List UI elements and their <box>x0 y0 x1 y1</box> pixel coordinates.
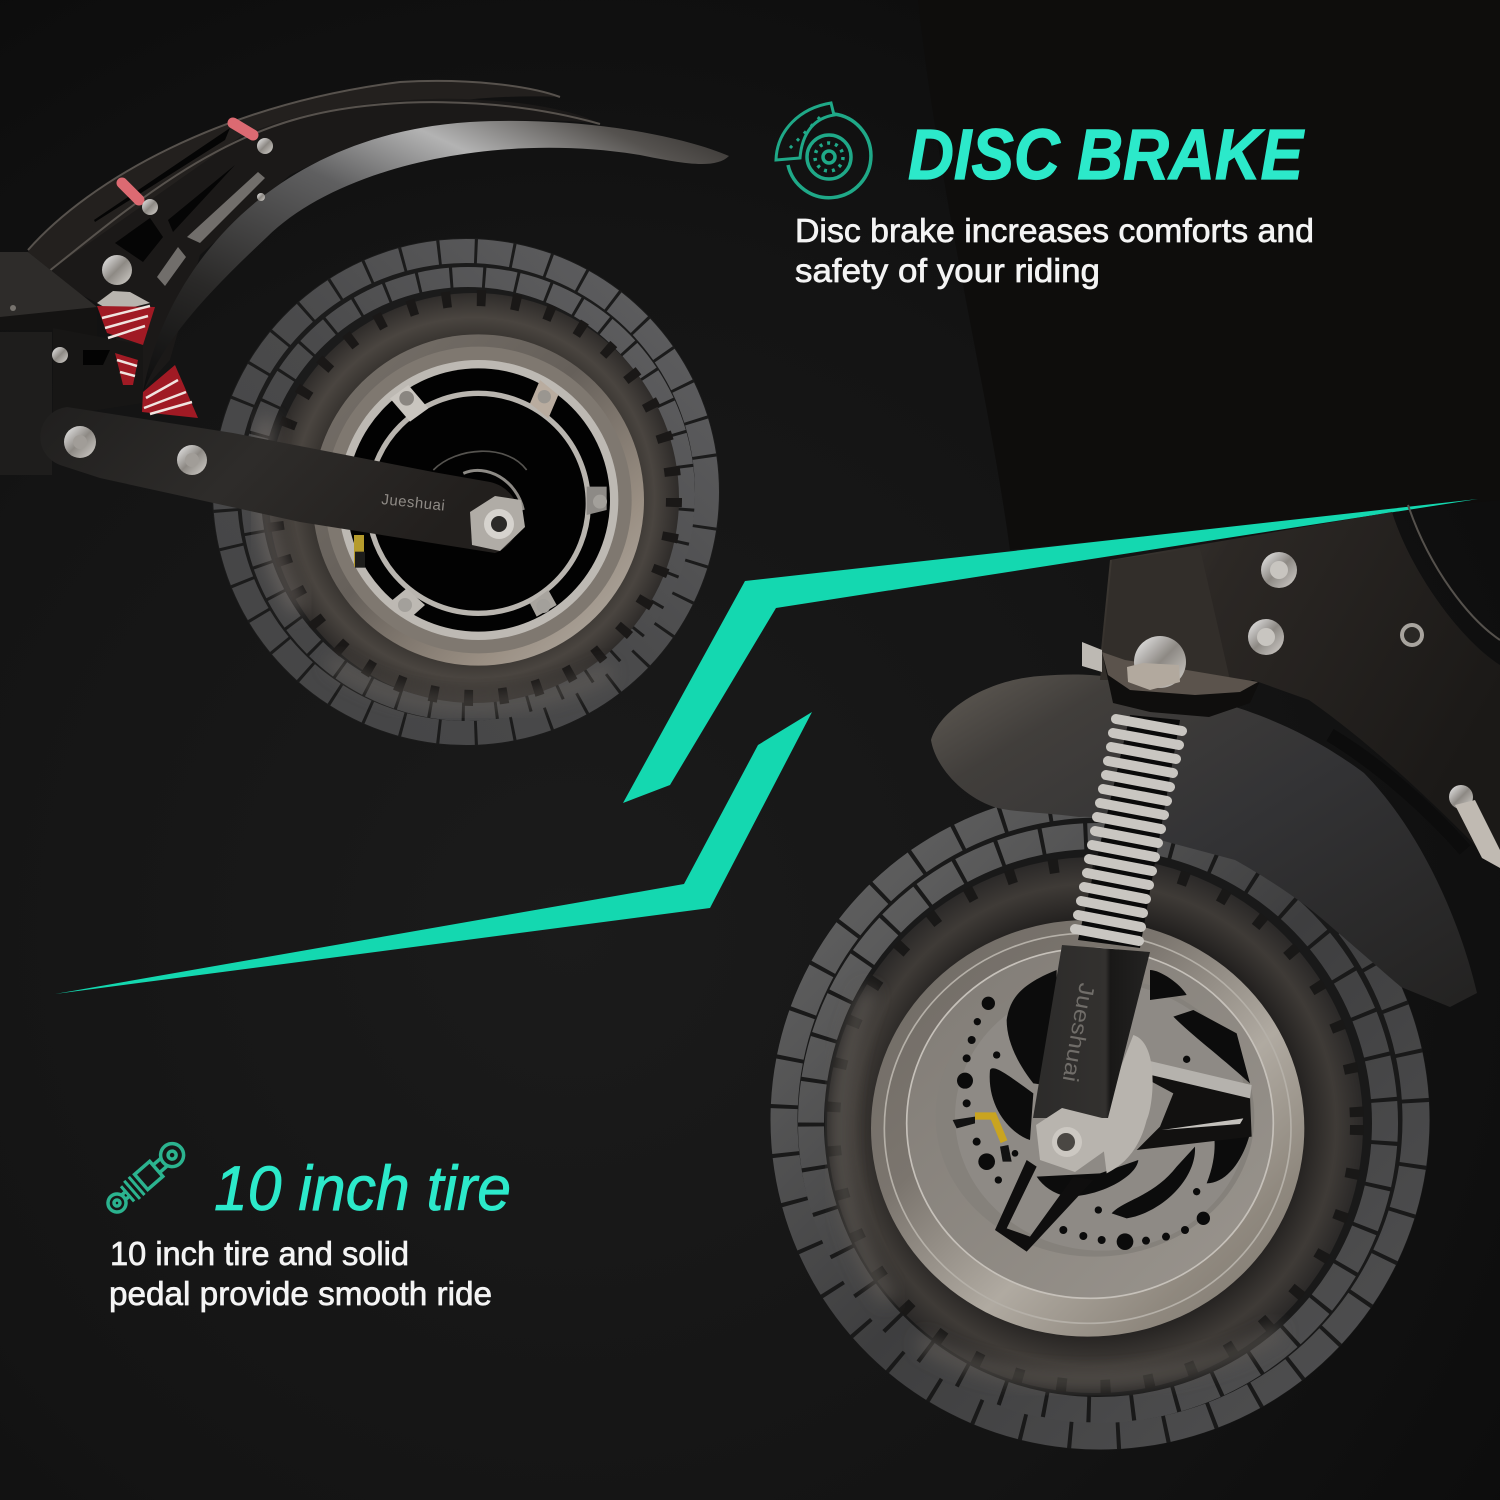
heading: 10 inch tire: 10 inch tire <box>214 1154 511 1224</box>
rear tire <box>212 238 720 746</box>
scooter deck block <box>0 252 143 475</box>
rear fender <box>28 81 729 392</box>
wheel spokes and hub <box>1100 1035 1252 1173</box>
text: 10 inch tire description <box>109 1235 492 1312</box>
front wheel photo <box>770 505 1500 1450</box>
text: 10 inch tire description: pedal provide smooth ride <box>109 1275 492 1312</box>
hub arcs <box>433 451 527 470</box>
valve <box>354 535 364 567</box>
teal stripe lower <box>55 712 812 994</box>
coil spring <box>1075 715 1182 948</box>
icon: shock absorber <box>102 1139 189 1218</box>
fork tines <box>995 1160 1093 1252</box>
heading: disc brake: DISC BRAKE <box>908 116 1305 195</box>
text: 10 inch tire description: 10 inch tire and solid <box>110 1235 409 1272</box>
brand label: front fork: Jueshuai <box>1058 981 1100 1084</box>
front fender <box>931 675 1477 1007</box>
fork leg <box>1033 945 1150 1118</box>
feature: 10 inch tire <box>102 1139 511 1312</box>
front tire <box>770 790 1430 1450</box>
rear suspension springs <box>97 291 198 418</box>
bracket and dome nut <box>1082 636 1259 717</box>
text: disc brake description <box>795 212 1314 289</box>
axle nut <box>1036 1108 1106 1172</box>
teal stripe upper <box>623 499 1478 803</box>
scooter frame plate <box>1100 505 1500 868</box>
brake disc <box>955 970 1250 1251</box>
front fork and spring <box>1033 548 1259 1172</box>
text: disc brake description: safety of your riding <box>795 252 1100 289</box>
icon: disc brake <box>776 103 871 198</box>
valve stem <box>953 1116 1012 1162</box>
front rim and disc <box>871 920 1304 1337</box>
text: disc brake description: Disc brake increases comforts and <box>795 212 1314 249</box>
inner ring and lugs <box>368 380 607 618</box>
dark backdrop shape behind heading <box>918 0 1500 550</box>
rear rim <box>313 334 644 666</box>
rear wheel photo <box>0 81 729 746</box>
rear swing arm <box>40 407 525 553</box>
feature: disc brake <box>776 103 1314 289</box>
brand label: rear arm: Jueshuai <box>381 491 446 515</box>
